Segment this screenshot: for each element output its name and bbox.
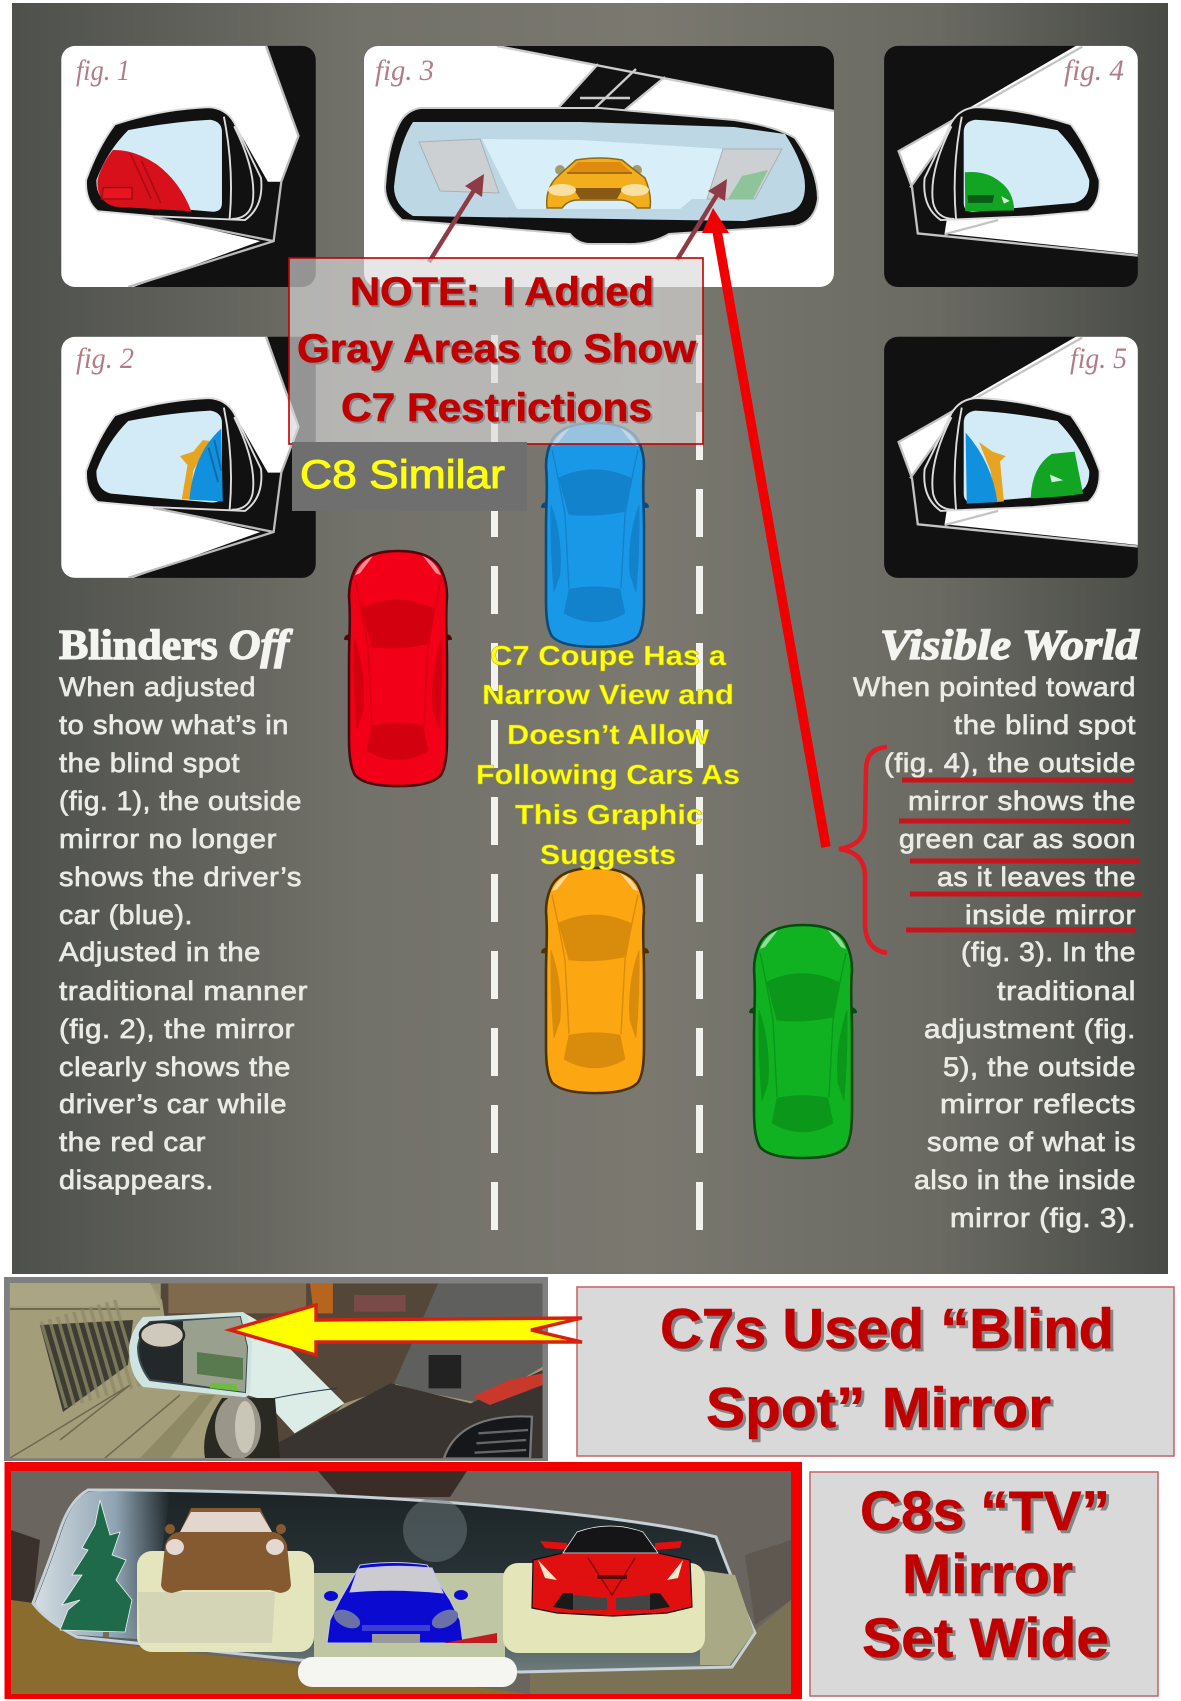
red underlines bbox=[899, 780, 1142, 930]
text block: yellow C7 coupe note: This Graphic bbox=[515, 799, 703, 830]
beige patch right bbox=[503, 1563, 705, 1653]
text block: Blinders Off body: Adjusted in the bbox=[59, 937, 261, 967]
panel: fig. 5 outside mirror with blue and green cars bbox=[884, 333, 1142, 578]
car: blue bbox=[541, 423, 649, 647]
arrow: yellow pointing at blind spot mirror bbox=[230, 1305, 582, 1355]
figure labels: fig. 2 bbox=[76, 342, 134, 375]
callout: C8 TV mirror label bbox=[810, 1472, 1158, 1696]
callout: C8 similar bbox=[292, 442, 527, 511]
photo: C7 blind spot mirror bbox=[4, 1277, 548, 1461]
callout: note about gray areas: Gray Areas to Show bbox=[297, 327, 697, 371]
panel: fig. 1 outside mirror with red car bbox=[57, 42, 316, 289]
car: orange bbox=[541, 868, 649, 1093]
text block: Visible World body bbox=[853, 672, 1136, 1233]
callout: C8 TV mirror label: Set Wide bbox=[862, 1606, 1109, 1669]
text block: Blinders Off body: disappears. bbox=[59, 1165, 214, 1195]
text block: Visible World body: mirror (fig. 3). bbox=[950, 1203, 1136, 1233]
text block: yellow C7 coupe note: Doesn’t Allow bbox=[507, 719, 710, 750]
text block: Visible World body: When pointed toward bbox=[853, 672, 1136, 702]
text block: yellow C7 coupe note bbox=[476, 640, 740, 870]
car: red bbox=[344, 551, 452, 786]
beige patch left bbox=[137, 1551, 314, 1652]
text block: Blinders Off body: shows the driver’s bbox=[59, 862, 302, 892]
text block: Blinders Off body: the red car bbox=[59, 1127, 206, 1157]
car: brown rear view bbox=[161, 1508, 291, 1593]
panel: fig. 2 outside mirror with blue car bbox=[57, 333, 316, 580]
car: green bbox=[749, 925, 857, 1158]
panel: fig. 3 rearview mirror bbox=[364, 40, 834, 287]
text block: Blinders Off body: car (blue). bbox=[59, 900, 193, 930]
text block: Visible World body: adjustment (fig. bbox=[924, 1014, 1136, 1044]
arrow: maroon to left gray area bbox=[429, 174, 484, 262]
callout: C7 blind spot mirror label bbox=[577, 1287, 1174, 1456]
text block: Blinders Off body: mirror no longer bbox=[59, 824, 277, 854]
text block: Blinders Off body: to show what’s in bbox=[59, 710, 289, 740]
panel: fig. 4 outside mirror with green car bbox=[884, 42, 1142, 287]
car: red supercar front view bbox=[532, 1526, 692, 1616]
text block: Blinders Off body: (fig. 1), the outside bbox=[59, 786, 302, 816]
callout: note about gray areas: C7 Restrictions bbox=[341, 386, 652, 430]
figure labels: fig. 1 bbox=[76, 54, 130, 87]
figure labels bbox=[76, 54, 1127, 375]
text block: Visible World body: as it leaves the bbox=[937, 862, 1136, 892]
text block: Visible World body: green car as soon bbox=[899, 824, 1136, 854]
callout: C8 similar: C8 Similar bbox=[300, 453, 505, 497]
callout: C8 TV mirror label: Mirror bbox=[902, 1542, 1073, 1605]
text block: Blinders Off body: When adjusted bbox=[59, 672, 256, 702]
callout: C7 blind spot mirror label: Spot” Mirror bbox=[706, 1376, 1051, 1440]
text block: yellow C7 coupe note: C7 Coupe Has a bbox=[490, 640, 727, 671]
text block: yellow C7 coupe note: Following Cars As bbox=[476, 759, 740, 790]
arrow: maroon to right gray area bbox=[677, 179, 727, 260]
callout: note about gray areas bbox=[289, 258, 703, 444]
arrow: big red from brace to mirror bbox=[702, 208, 826, 847]
icon: yellow car in rearview mirror bbox=[547, 158, 650, 208]
text block: yellow C7 coupe note: Narrow View and bbox=[482, 679, 734, 710]
road background panel bbox=[12, 3, 1168, 1274]
text block: yellow C7 coupe note: Suggests bbox=[540, 839, 676, 870]
text block: Blinders Off body: driver’s car while bbox=[59, 1089, 287, 1119]
text block: Visible World body: also in the inside bbox=[914, 1165, 1136, 1195]
text block: Visible World body: some of what is bbox=[927, 1127, 1136, 1157]
text block: Blinders Off body: (fig. 2), the mirror bbox=[59, 1014, 295, 1044]
text block: Blinders Off body bbox=[59, 672, 308, 1195]
photo: C8 TV mirror with cars bbox=[4, 1462, 802, 1699]
text block: Visible World body: mirror shows the bbox=[908, 786, 1136, 816]
text block: Visible World body: inside mirror bbox=[965, 900, 1136, 930]
callout: note about gray areas: NOTE: I Added bbox=[350, 270, 654, 314]
car: blue front view bbox=[324, 1562, 468, 1643]
callout: C7 blind spot mirror label: C7s Used “Blind bbox=[660, 1297, 1114, 1361]
figure labels: fig. 4 bbox=[1064, 54, 1124, 87]
road lane dashes bbox=[491, 335, 703, 1230]
text block: Blinders Off body: traditional manner bbox=[59, 976, 308, 1006]
text block: Blinders Off body: clearly shows the bbox=[59, 1052, 291, 1082]
heading: Visible World: Visible World bbox=[880, 623, 1140, 669]
icon: pine tree bbox=[60, 1500, 132, 1637]
text block: Visible World body: traditional bbox=[997, 976, 1136, 1006]
tan car body bbox=[10, 1283, 250, 1458]
heading: Blinders Off: Blinders Off bbox=[59, 623, 293, 669]
text block: Visible World body: mirror reflects bbox=[940, 1089, 1136, 1119]
text block: Visible World body: the blind spot bbox=[954, 710, 1136, 740]
text block: Blinders Off body: the blind spot bbox=[59, 748, 240, 778]
figure labels: fig. 5 bbox=[1070, 342, 1127, 375]
figure labels: fig. 3 bbox=[375, 54, 434, 87]
red brace bbox=[839, 747, 887, 953]
callout: C8 TV mirror label: C8s “TV” bbox=[860, 1479, 1110, 1542]
text block: Visible World body: (fig. 3). In the bbox=[961, 937, 1136, 967]
text block: Visible World body: 5), the outside bbox=[943, 1052, 1136, 1082]
text block: Visible World body: (fig. 4), the outside bbox=[884, 748, 1136, 778]
red wedge bbox=[444, 1633, 497, 1643]
